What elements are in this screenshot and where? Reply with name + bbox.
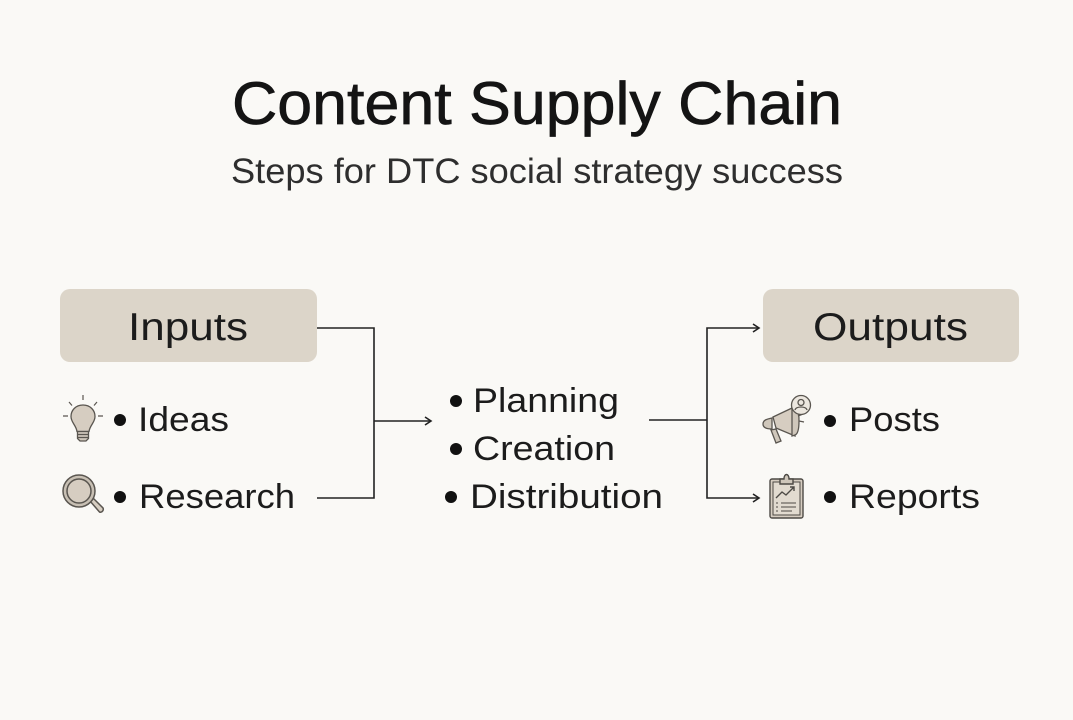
item: ideas: Ideas: [138, 401, 229, 439]
item: research: Research: [139, 478, 295, 516]
process list: Planning: [473, 382, 619, 420]
process list: Creation: [473, 430, 615, 468]
icon: magnifying glass: [63, 475, 103, 512]
icon: megaphone: [763, 396, 810, 443]
title: Content Supply Chain: [232, 70, 842, 137]
icon: clipboard report: [770, 474, 803, 518]
arrow: inputs to process: [317, 328, 431, 498]
item: posts: Posts: [849, 401, 940, 439]
process list: [445, 382, 663, 516]
process list: Distribution: [470, 478, 663, 516]
icon: light bulb: [63, 395, 103, 441]
panel: outputs: [763, 289, 1019, 362]
arrow: process to outputs: [649, 324, 759, 502]
subtitle: Steps for DTC social strategy success: [231, 152, 843, 191]
panel: outputs: Outputs: [813, 306, 968, 349]
panel: inputs: [60, 289, 317, 362]
item: reports: Reports: [849, 478, 980, 516]
panel: inputs: Inputs: [128, 306, 248, 349]
